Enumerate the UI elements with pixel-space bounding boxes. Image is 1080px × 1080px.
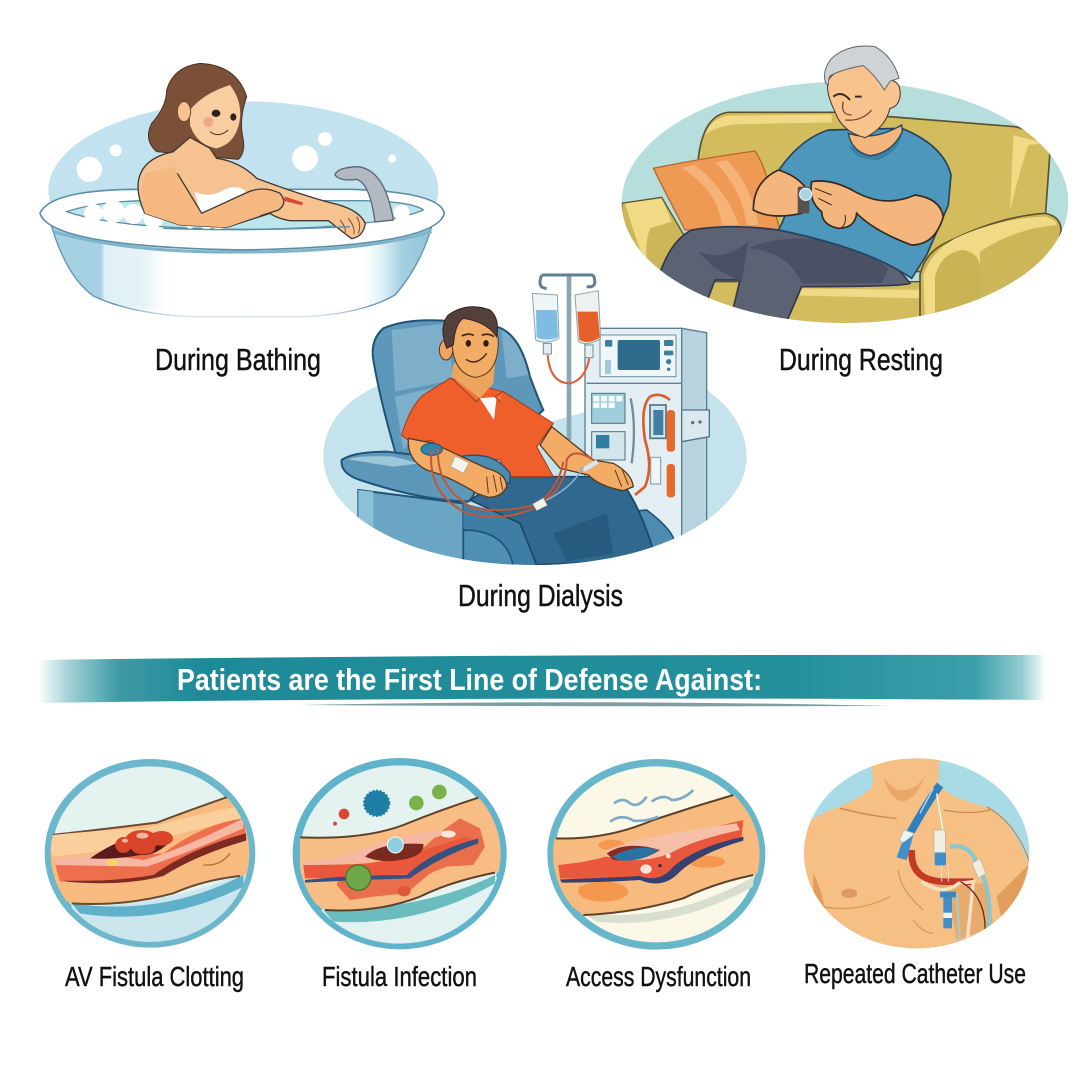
man face details [466, 340, 471, 347]
resting background oval [622, 82, 1068, 323]
sofa left arm [622, 196, 684, 276]
water and foam [67, 201, 423, 229]
banner [38, 655, 1046, 706]
wrist watch [798, 187, 809, 213]
IV bag: orange [575, 291, 601, 358]
man right arm and hand [540, 427, 633, 491]
woman fingers [340, 217, 360, 234]
panel: access dysfunction [550, 763, 767, 992]
panel: repeated catheter use [800, 750, 1033, 989]
icon: chest with catheter [800, 750, 1033, 957]
icon: narrowed vessel [550, 763, 767, 946]
catheter lines [912, 850, 973, 882]
bathroom background oval [48, 101, 438, 279]
trousers [470, 477, 653, 565]
heading: During Bathing: During Bathing [155, 342, 321, 377]
green bacterium [346, 865, 371, 890]
armrest [342, 452, 475, 502]
panel: fistula infection [296, 762, 513, 992]
skin blotches [578, 840, 725, 902]
IV tubing [548, 355, 589, 383]
label: Fistula Infection [322, 961, 477, 992]
man hair [443, 307, 497, 348]
germs [333, 785, 447, 826]
man head [452, 313, 498, 377]
man left arm [753, 170, 805, 216]
heading: During Dialysis: During Dialysis [458, 578, 623, 613]
woman forearm and hand [141, 167, 284, 227]
grey hair [825, 46, 899, 90]
recliner base [358, 490, 463, 567]
faucet [335, 167, 393, 222]
illustration: bathing scene [40, 63, 444, 320]
woman hair [148, 63, 247, 159]
red patch on forearm [283, 197, 303, 205]
catheter clamps and hubs [899, 830, 914, 844]
sofa seat [708, 282, 922, 325]
IV bag: blue [532, 293, 559, 354]
towel [194, 187, 247, 213]
blue catheter tube [910, 785, 940, 833]
man face details [833, 94, 862, 100]
woman face [190, 85, 240, 148]
red blood tubing loops [431, 448, 593, 517]
abscess [365, 844, 423, 861]
woman body and arm [138, 137, 365, 239]
pus droplet [387, 837, 403, 853]
bathtub rim [40, 189, 444, 250]
soap bubbles [77, 132, 396, 182]
tub lip front [163, 227, 350, 230]
orange pillow [653, 151, 780, 230]
wavy lines [610, 790, 693, 822]
man neck [848, 125, 902, 156]
panel: AV fistula clotting [30, 763, 263, 992]
man arm with fistula bandage [408, 438, 507, 497]
IV pole [540, 273, 595, 440]
heading: During Resting: During Resting [779, 342, 943, 377]
man neck [452, 363, 495, 398]
man right arm and hand [811, 181, 943, 245]
blue arm cushion [460, 455, 510, 483]
sofa back [698, 112, 1050, 275]
dialysis machine [585, 328, 709, 540]
vessel wall [303, 830, 443, 865]
icon: infected vessel and germs [296, 762, 513, 957]
recliner chair back [372, 319, 544, 454]
banner ribbon [38, 655, 1046, 703]
dark vein [305, 838, 478, 883]
blood clot [115, 830, 173, 854]
trousers [657, 227, 910, 322]
red skin inflammation [337, 818, 485, 900]
bathtub basin [52, 227, 432, 317]
white gap above the oval [527, 377, 587, 427]
man head [827, 62, 900, 138]
man fingers [815, 188, 845, 228]
banner title: Patients are the First Line of Defense Against: [177, 662, 762, 697]
illustration: dialysis scene [323, 273, 747, 568]
label: AV Fistula Clotting [65, 961, 244, 992]
label: Access Dysfunction [566, 961, 751, 992]
illustration: resting scene [622, 46, 1068, 325]
blue t-shirt [778, 128, 951, 278]
orange shirt [402, 378, 553, 477]
icon: clotted vessel in arm [30, 763, 263, 950]
vessel [558, 820, 743, 879]
dialysis background oval [323, 382, 747, 565]
sofa right arm [920, 213, 1061, 325]
